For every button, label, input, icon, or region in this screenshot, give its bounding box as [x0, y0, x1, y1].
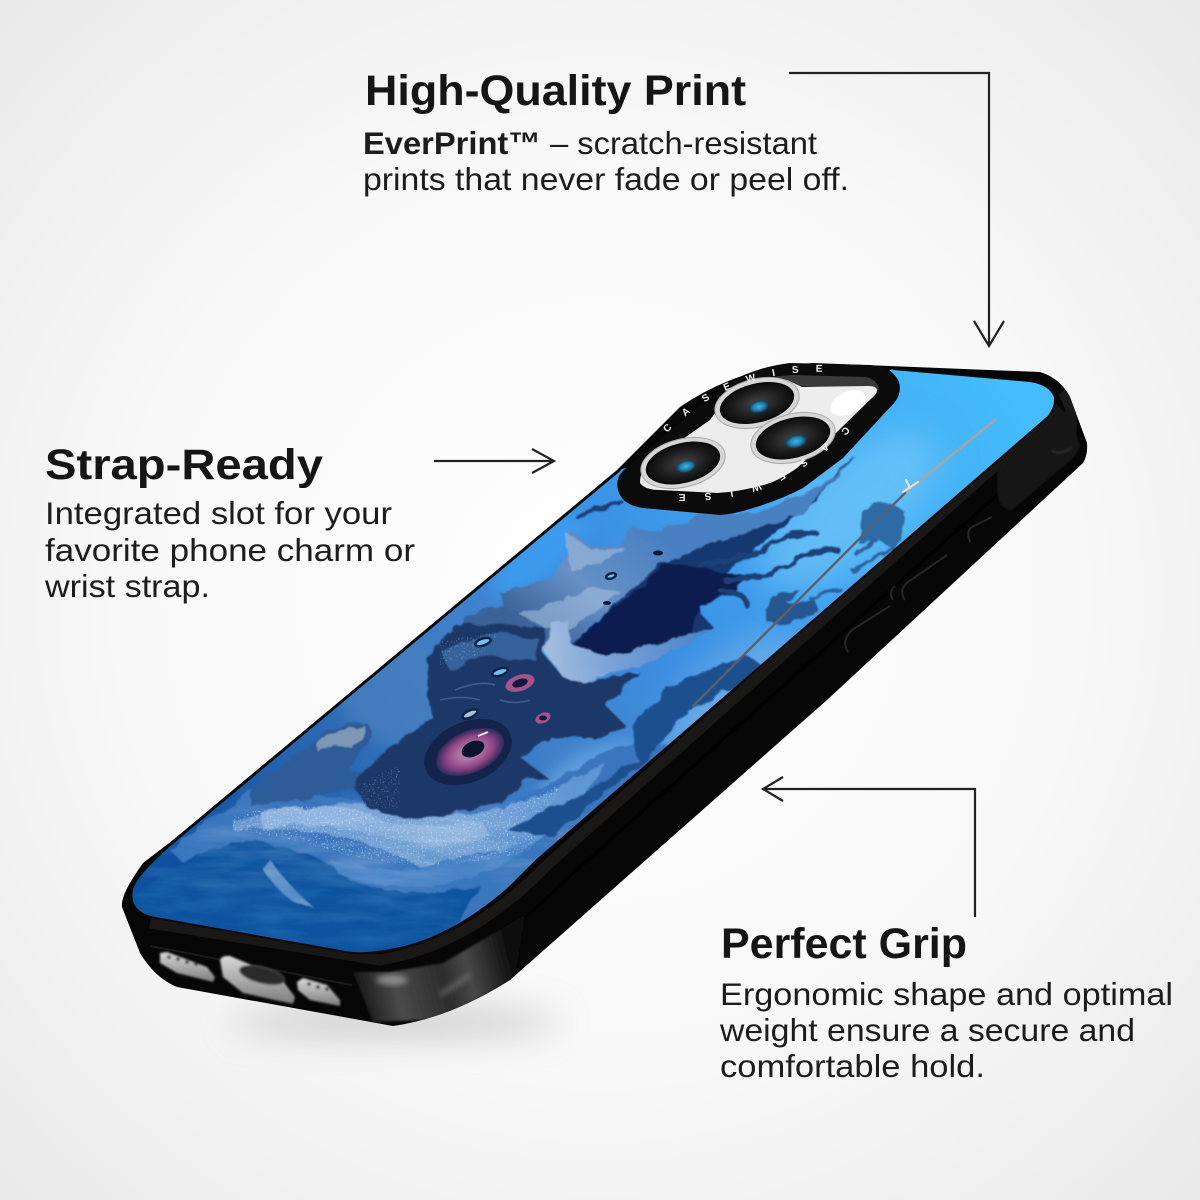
lower figure	[765, 590, 820, 625]
arrow: print to phone back	[789, 73, 1004, 346]
text: strap line 1: Integrated slot for your	[45, 495, 392, 531]
lens right	[745, 404, 841, 472]
arrow: strap to camera island	[434, 449, 554, 473]
right water streak	[330, 840, 530, 887]
heading: High-Quality Print: High-Quality Print	[365, 67, 746, 115]
painterly dark brush strokes	[130, 835, 570, 950]
lower right tentacle	[507, 655, 770, 837]
phone case	[122, 363, 1088, 1026]
water mid band	[170, 744, 668, 924]
screen rim	[131, 369, 1055, 953]
flash glare	[826, 385, 870, 421]
case side details	[150, 392, 1072, 985]
left speaker grille	[160, 952, 215, 982]
lens left	[635, 429, 731, 497]
foam specks	[233, 785, 560, 865]
brand ring text top: CASEWISE	[664, 364, 822, 432]
deep water left	[183, 839, 481, 952]
eye: big pink	[424, 719, 512, 785]
heading: Perfect Grip: Perfect Grip	[721, 920, 967, 968]
dark head mass	[353, 623, 640, 820]
lens top	[709, 369, 805, 437]
text: strap line 3: wrist strap.	[44, 568, 210, 604]
heading block: perfect grip	[719, 920, 1173, 1084]
head specks	[355, 632, 500, 810]
camera well	[640, 380, 877, 493]
camera island	[617, 363, 900, 515]
heading block: high-quality print	[363, 67, 849, 197]
rock highlight	[318, 725, 366, 752]
heading block: strap-ready	[44, 441, 415, 604]
figure tendrils	[810, 540, 895, 600]
tentacle strokes	[578, 503, 838, 607]
spear	[693, 420, 995, 706]
brand ring text bottom: CASEWISE	[679, 428, 849, 501]
eyes: cyan	[461, 572, 617, 721]
lower jaw	[543, 620, 713, 683]
sea and sky base	[132, 369, 1054, 952]
dark pits	[603, 550, 663, 605]
mouth	[570, 562, 750, 657]
sky glows	[340, 401, 966, 834]
strap slot	[997, 411, 1080, 510]
eye: medium pink	[506, 674, 534, 692]
text: everprint line 1: EverPrint™ – scratch-resistant	[363, 125, 817, 161]
text: grip line 2: weight ensure a secure and	[719, 1012, 1135, 1048]
bottom corner highlight	[353, 915, 525, 1022]
crest and upper body	[463, 462, 850, 650]
mid water streak	[262, 862, 312, 906]
foam lobes	[260, 807, 490, 843]
text: strap line 2: favorite phone charm or	[45, 532, 415, 568]
rear dark crest mass	[570, 455, 855, 657]
creature layers	[250, 455, 905, 837]
arrow: grip to phone side	[763, 777, 975, 917]
spear figure	[860, 503, 905, 550]
charging port	[220, 956, 295, 1004]
crest pale highlight	[520, 532, 625, 630]
rock	[250, 722, 372, 805]
text: everprint line 2: prints that never fade or peel off.	[363, 161, 849, 197]
head mid tone	[440, 632, 540, 670]
water layers	[170, 744, 668, 952]
right speaker grille	[297, 978, 340, 1006]
frame top sheen	[743, 375, 879, 390]
text: grip line 3: comfortable hold.	[720, 1048, 985, 1084]
head contour lines	[440, 683, 530, 702]
case body silhouette	[122, 363, 1087, 1026]
foam belt	[233, 762, 605, 867]
painterly white brush strokes	[200, 805, 610, 885]
side buttons	[845, 517, 992, 652]
phone drop shadow	[230, 1007, 560, 1037]
eye: small pink	[535, 712, 550, 724]
heading: Strap-Ready: Strap-Ready	[45, 441, 323, 489]
island frame	[617, 363, 900, 515]
artwork panel	[132, 369, 1054, 952]
text: grip line 1: Ergonomic shape and optimal	[720, 976, 1173, 1012]
